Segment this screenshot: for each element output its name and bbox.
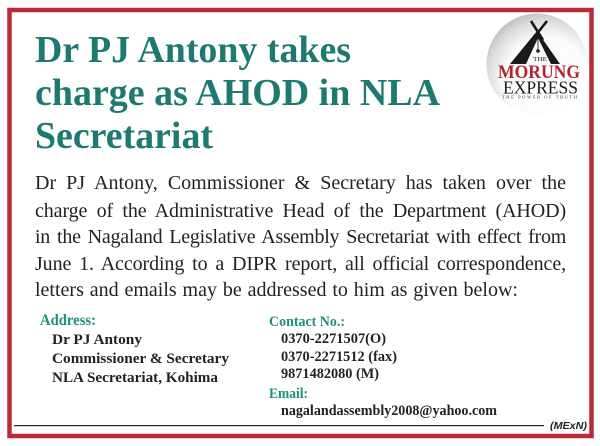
logo text: Express: EXPRESS (503, 78, 578, 98)
email address: nagalandassembly2008@yahoo.com (281, 403, 497, 419)
body paragraph: charge of the Administrative Head of the Department (AHOD) (35, 200, 566, 222)
bottom rule (14, 425, 544, 426)
phone numbers: 0370-2271507(O) (281, 331, 386, 347)
contact block (269, 314, 497, 419)
headline (35, 29, 441, 157)
icon: crossed poles hut (510, 21, 560, 64)
logo text: Morung: MORUNG (498, 62, 580, 83)
address lines: Commissioner & Secretary (52, 351, 230, 367)
contact heading: Contact No.: (269, 314, 345, 330)
logo: The Morung Express (486, 14, 588, 114)
body paragraph (35, 172, 566, 301)
body paragraph: Dr PJ Antony, Commissioner & Secretary has taken over the (35, 172, 566, 194)
headline: Dr PJ Antony takes (35, 29, 351, 71)
logo text: the: THE (533, 56, 547, 63)
address lines: NLA Secretariat, Kohima (52, 370, 218, 386)
logo tagline: THE POWER OF TRUTH (502, 94, 578, 100)
headline: Secretariat (35, 115, 213, 157)
address heading: Address: (40, 312, 96, 329)
phone numbers: 0370-2271512 (fax) (281, 349, 397, 365)
credit: (MExN) (550, 420, 588, 432)
body paragraph: June 1. According to a DIPR report, all official correspondence, (35, 253, 566, 275)
body paragraph: letters and emails may be addressed to him as given below: (35, 279, 518, 301)
email heading: Email: (269, 386, 308, 402)
logo disc (486, 14, 588, 114)
address lines (52, 332, 230, 386)
body paragraph: in the Nagaland Legislative Assembly Secretariat with effect from (35, 226, 566, 248)
headline: charge as AHOD in NLA (35, 72, 441, 114)
phone numbers (281, 331, 397, 382)
address lines: Dr PJ Antony (52, 332, 142, 348)
phone numbers: 9871482080 (M) (281, 366, 379, 382)
address block (40, 312, 230, 386)
